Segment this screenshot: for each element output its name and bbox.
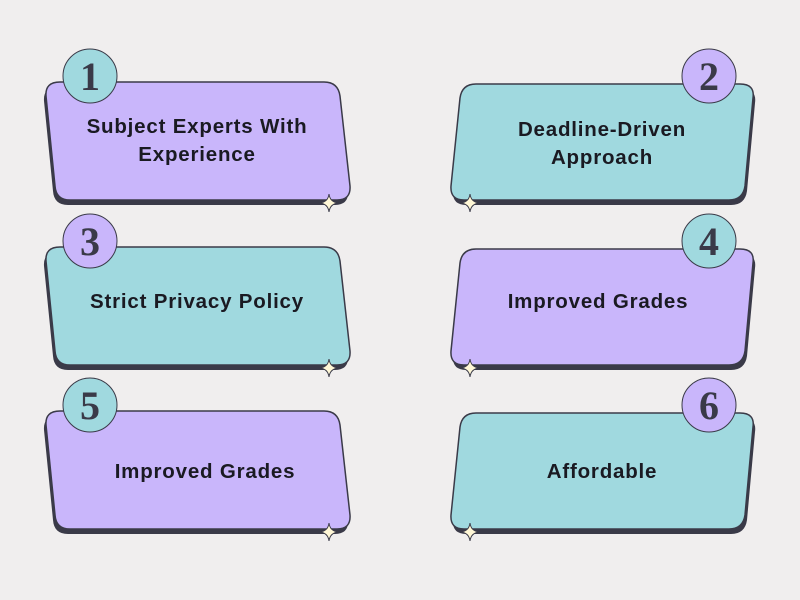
text 2: Deadline-Driven [518,118,686,141]
sparkle 6 [461,523,479,541]
sparkle 4 [461,359,479,377]
card 1 [44,49,350,212]
number badge 4: 4 [699,219,719,264]
text 4: Improved Grades [508,290,688,313]
number badge 3 [63,214,117,268]
number badge 5: 5 [80,383,100,428]
text 1: Subject Experts With [87,115,307,138]
card 2 [451,49,755,212]
number badge 4 [682,214,736,268]
number badge 1: 1 [80,54,100,99]
number badge 2: 2 [699,54,719,99]
card 2: Approach [551,146,653,169]
sparkle 2 [461,194,479,212]
number badge 1 [63,49,117,103]
card 3 [44,214,350,377]
number badge 3: 3 [80,219,100,264]
card 1: Experience [138,143,256,166]
number badge 2 [682,49,736,103]
card 5 [44,378,350,541]
text 6: Affordable [547,460,657,483]
text 3: Strict Privacy Policy [90,290,304,313]
sparkle 3 [320,359,338,377]
card 6 [451,378,755,541]
text 5: Improved Grades [115,460,295,483]
card 4 [451,214,755,377]
sparkle 1 [320,194,338,212]
number badge 6: 6 [699,383,719,428]
number badge 5 [63,378,117,432]
sparkle 5 [320,523,338,541]
number badge 6 [682,378,736,432]
